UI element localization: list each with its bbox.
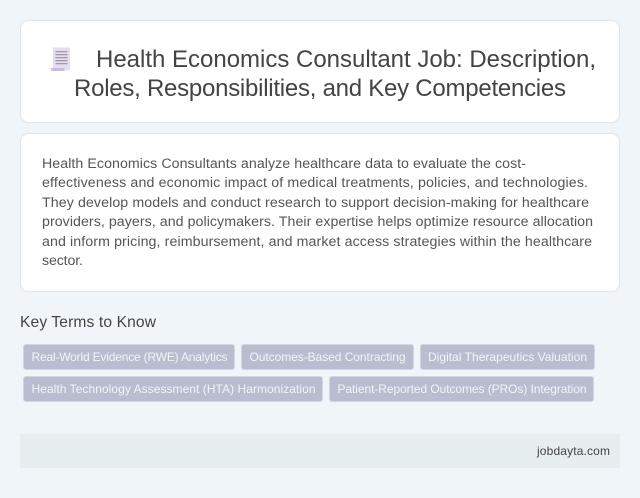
footer source text: jobdayta.com [536, 444, 610, 458]
description paragraph: sector. [42, 253, 83, 269]
panel: title card [20, 20, 620, 122]
tag: PROs integration: Patient-Reported Outcomes (PROs) Integration [338, 382, 586, 396]
description paragraph: and inform pricing, reimbursement, and market access strategies within the healthcare [42, 234, 592, 250]
tag: RWE analytics [24, 344, 234, 370]
panel: description card [20, 134, 620, 292]
tag: PROs integration [330, 376, 594, 402]
tag: digital therapeutics valuation: Digital Therapeutics Valuation [428, 350, 587, 364]
description paragraph: Health Economics Consultants analyze healthcare data to evaluate the cost- [42, 156, 526, 172]
heading: key terms: Key Terms to Know [20, 314, 157, 331]
description paragraph: They develop models and conduct research to support decision-making for healthcare [42, 195, 589, 211]
description paragraph: providers, payers, and policymakers. Their expertise helps optimize resource allocation [42, 214, 593, 230]
icon: document receipt [51, 48, 70, 71]
tag: outcomes-based contracting [242, 344, 414, 370]
tag: RWE analytics: Real-World Evidence (RWE) Analytics [32, 350, 228, 364]
tag: HTA harmonization: Health Technology Assessment (HTA) Harmonization [32, 382, 316, 396]
tag: outcomes-based contracting: Outcomes-Based Contracting [250, 350, 406, 364]
tag: HTA harmonization [24, 376, 322, 402]
tag: digital therapeutics valuation [420, 344, 594, 370]
title line 2: Roles, Responsibilities, and Key Competencies [74, 75, 566, 102]
title line 1: Health Economics Consultant Job: Description, [96, 46, 596, 73]
description paragraph: effectiveness and economic impact of medical treatments, policies, and technologies. [42, 175, 588, 191]
description paragraph [42, 156, 593, 269]
footer bar [20, 434, 620, 468]
